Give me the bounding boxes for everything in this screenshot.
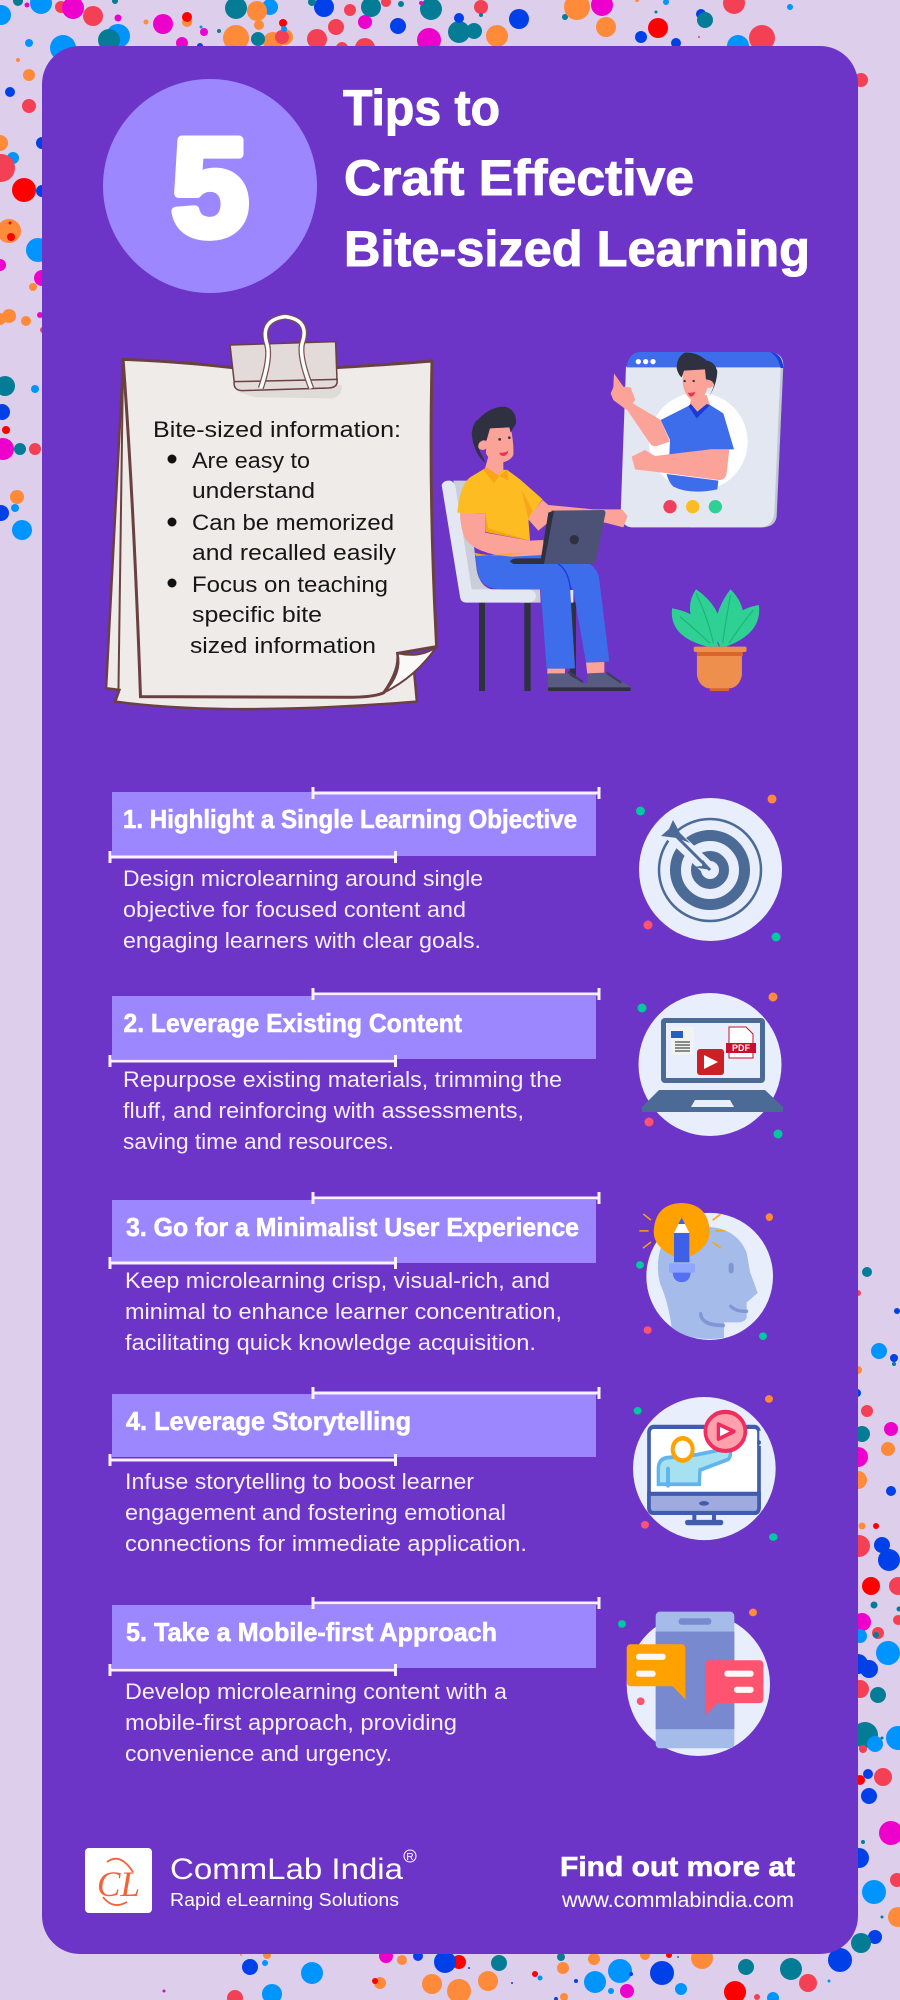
section 3 body text (125, 1268, 562, 1355)
section 4 heading bar: 4. Leverage Storytelling (126, 1406, 411, 1436)
paper note text: Are easy to (192, 448, 310, 473)
section 3 body text: Keep microlearning crisp, visual-rich, and (125, 1268, 550, 1293)
title: Tips to (343, 80, 500, 136)
icon: monitor with video play (633, 1395, 778, 1541)
paper note text: understand (192, 478, 315, 503)
badge: number 5 circle (103, 79, 317, 293)
section 4 body text: Infuse storytelling to boost learner (125, 1469, 474, 1494)
paper note text: sized information (190, 633, 376, 658)
section 3: minimalist user experience (110, 1192, 773, 1355)
section 5 body text (125, 1679, 508, 1766)
section 2: leverage existing content (110, 988, 783, 1154)
section 4: leverage storytelling (110, 1387, 778, 1556)
icon: head with light bulb and pencil (636, 1203, 773, 1340)
section 3 body text: facilitating quick knowledge acquisition. (125, 1330, 536, 1355)
icon: phone with chat bubbles (618, 1609, 770, 1756)
icon: laptop with documents: PDF (732, 1043, 751, 1053)
icon: target with arrow (636, 794, 782, 942)
footer: CommLab India logo (85, 1848, 416, 1913)
footer: CommLab India logo: CommLab India (170, 1853, 403, 1886)
section 3 heading bar (110, 1192, 599, 1269)
section 4 body text: engagement and fostering emotional (125, 1500, 506, 1525)
title (343, 80, 810, 277)
section 4 heading bar (110, 1387, 599, 1466)
footer: CommLab India logo: CL (97, 1864, 140, 1904)
paper note text (153, 417, 401, 658)
section 2 heading bar (110, 988, 599, 1067)
footer: CommLab India logo: R (406, 1852, 414, 1863)
section 1 heading bar (110, 787, 599, 863)
footer: website call to action: www.commlabindia.com (561, 1889, 794, 1912)
illustration: video call window (611, 352, 783, 527)
section 2 body text: Repurpose existing materials, trimming the (123, 1067, 562, 1092)
section 5 body text: convenience and urgency. (125, 1741, 392, 1766)
paper note text: specific bite (192, 602, 322, 627)
section 1 body text: objective for focused content and (123, 897, 466, 922)
section 2 body text (123, 1067, 562, 1154)
section 1: highlight a single learning objective (110, 787, 782, 953)
section 5 body text: mobile-first approach, providing (125, 1710, 457, 1735)
illustration: man with laptop on chair (442, 407, 631, 691)
section 2 body text: saving time and resources. (123, 1129, 394, 1154)
section 5 heading bar: 5. Take a Mobile-first Approach (126, 1617, 497, 1647)
paper note text: and recalled easily (192, 540, 396, 565)
paper note text: Bite-sized information: (153, 417, 401, 442)
section 5: mobile-first approach (110, 1597, 770, 1766)
footer: CommLab India logo: Rapid eLearning Solutions (170, 1890, 399, 1910)
illustration: potted plant (672, 589, 759, 691)
paper note text: Focus on teaching (192, 572, 388, 597)
paper note text: Can be memorized (192, 510, 394, 535)
panel: clipped paper note (106, 317, 437, 709)
title: Bite-sized Learning (344, 221, 810, 277)
section 4 body text: connections for immediate application. (125, 1531, 527, 1556)
section 1 body text: engaging learners with clear goals. (123, 928, 481, 953)
section 3 body text: minimal to enhance learner concentration, (125, 1299, 562, 1324)
title: Craft Effective (344, 150, 694, 206)
section 5 body text: Develop microlearning content with a (125, 1679, 508, 1704)
section 2 heading bar: 2. Leverage Existing Content (124, 1008, 462, 1038)
icon: laptop with documents (638, 992, 783, 1138)
section 3 heading bar: 3. Go for a Minimalist User Experience (126, 1212, 579, 1242)
section 4 body text (125, 1469, 527, 1556)
badge: number 5 circle: 5 (172, 111, 248, 265)
section 1 body text (123, 866, 483, 953)
section 1 body text: Design microlearning around single (123, 866, 483, 891)
section 2 body text: fluff, and reinforcing with assessments, (123, 1098, 524, 1123)
section 5 heading bar (110, 1597, 599, 1676)
section 1 heading bar: 1. Highlight a Single Learning Objective (123, 804, 577, 834)
footer: website call to action: Find out more at (560, 1851, 795, 1882)
footer: website call to action (560, 1851, 795, 1912)
